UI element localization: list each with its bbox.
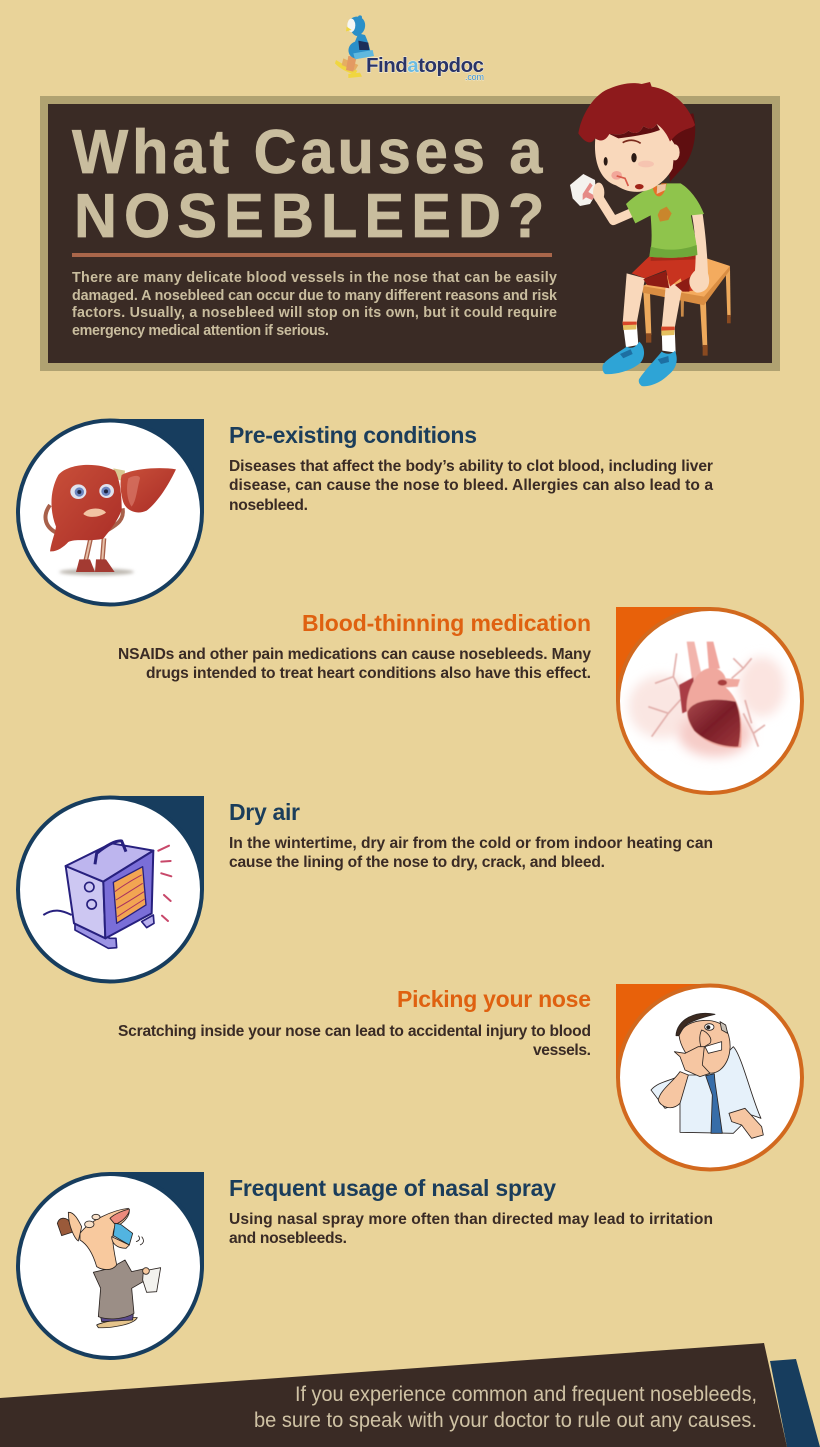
heading: Blood-thinning medication (302, 610, 591, 636)
body text: and nosebleeds. (229, 1230, 347, 1247)
intro paragraph: emergency medical attention if serious. (72, 323, 329, 339)
face details (623, 140, 641, 143)
panel: pre-existing conditions (18, 419, 713, 604)
shirt (626, 183, 704, 258)
illustration: anatomical heart (628, 642, 785, 757)
body text: drugs intended to treat heart conditions also have this effect. (146, 665, 591, 682)
icon badge (18, 796, 204, 982)
back hair (653, 113, 695, 182)
illustration: space heater (43, 841, 154, 948)
panel: picking your nose (118, 984, 802, 1170)
icon badge (18, 1172, 204, 1358)
body text: In the wintertime, dry air from the cold or from indoor heating can (229, 835, 713, 852)
dark banner shape (0, 1343, 787, 1447)
body text: cause the lining of the nose to dry, crack, and bleed. (229, 854, 605, 871)
body text: disease, can cause the nose to bleed. Allergies can also lead to a (229, 477, 713, 494)
body text: Scratching inside your nose can lead to accidental injury to blood (118, 1023, 591, 1040)
icon: logo bird mascot (335, 15, 374, 78)
panel: header (44, 82, 776, 386)
navy accent (770, 1359, 820, 1447)
shorts (632, 254, 698, 292)
illustration: sad liver (46, 465, 176, 575)
tissue (570, 174, 596, 206)
closing message: be sure to speak with your doctor to rule out any causes. (254, 1408, 757, 1432)
body text: Using nasal spray more often than directed may lead to irritation (229, 1211, 713, 1228)
front hair (578, 82, 695, 142)
logo: Findatopdoc (335, 15, 484, 82)
body text: NSAIDs and other pain medications can cause nosebleeds. Many (118, 646, 591, 663)
body text (118, 646, 591, 682)
socks (623, 322, 638, 347)
illustration: man using nasal spray (57, 1208, 161, 1328)
closing message: If you experience common and frequent nosebleeds, (295, 1382, 757, 1406)
heading: Frequent usage of nasal spray (229, 1175, 556, 1201)
icon badge (616, 607, 802, 793)
intro paragraph: There are many delicate blood vessels in the nose that can be easily (72, 270, 557, 286)
body text: Diseases that affect the body’s ability to clot blood, including liver (229, 458, 713, 475)
shoes (602, 342, 644, 374)
body text: vessels. (533, 1042, 591, 1059)
front arm (599, 198, 632, 221)
panel: frequent usage of nasal spray (18, 1172, 713, 1358)
stool (643, 258, 731, 356)
intro paragraph (72, 270, 557, 339)
panel: dry air (18, 796, 713, 982)
legs (623, 273, 645, 323)
panel: blood-thinning medication (118, 607, 802, 793)
icon: heat lines (158, 846, 171, 921)
header frame (44, 100, 776, 367)
body text (229, 1211, 713, 1247)
footer banner (0, 1343, 820, 1447)
logo wordmark: Findatopdoc (366, 54, 484, 77)
heading: Dry air (229, 799, 300, 825)
illustration: man picking nose (651, 1013, 763, 1138)
head (595, 117, 675, 192)
title line 2: NOSEBLEED? (74, 181, 544, 250)
logo .com suffix: .com (465, 72, 484, 82)
body text (118, 1023, 591, 1059)
body text (229, 458, 713, 514)
closing message (254, 1382, 757, 1432)
body text: nosebleed. (229, 497, 308, 514)
icon badge (616, 984, 802, 1170)
illustration: boy with nosebleed on stool (570, 82, 731, 386)
title line 1: What Causes a (72, 117, 544, 186)
intro paragraph: factors. Usually, a nosebleed will stop on its own, but it could require (72, 305, 557, 321)
intro paragraph: damaged. A nosebleed can occur due to many different reasons and risk (72, 288, 557, 304)
heading: Pre-existing conditions (229, 422, 477, 448)
body text (229, 835, 713, 871)
icon badge (18, 419, 204, 604)
heading: Picking your nose (397, 986, 591, 1012)
back arm and hand (689, 213, 709, 293)
title underline (72, 253, 552, 257)
